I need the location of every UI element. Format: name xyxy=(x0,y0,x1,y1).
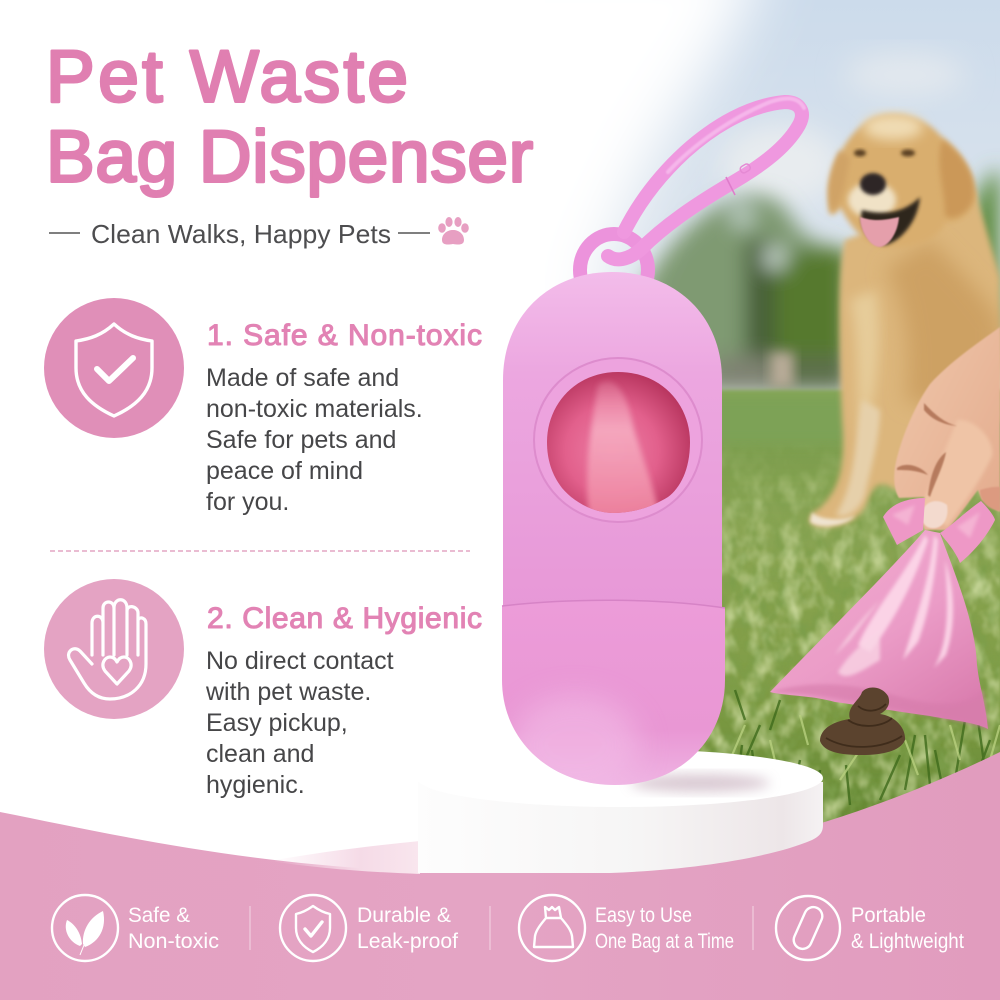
hand holding bag xyxy=(894,327,1000,530)
icon: tied bag xyxy=(519,895,585,961)
sky xyxy=(540,0,1000,400)
label: Non-toxic xyxy=(128,930,219,953)
icon: paw print xyxy=(438,217,469,245)
dog waste xyxy=(820,687,905,755)
label: One Bag at a Time xyxy=(595,930,734,953)
attachment ring xyxy=(580,234,648,306)
title xyxy=(46,36,533,198)
body text: clean and hygienic: Easy pickup, xyxy=(206,709,348,737)
benefits row xyxy=(52,895,964,961)
body text: clean and hygienic: clean and xyxy=(206,740,314,768)
clip latch xyxy=(726,177,735,195)
label xyxy=(128,904,219,953)
grass texture xyxy=(698,456,1000,822)
white fade over photo xyxy=(0,0,770,880)
icon: capsule xyxy=(776,896,840,960)
capsule bottom shell xyxy=(502,600,725,785)
podium side xyxy=(418,782,823,873)
dispenser shadow xyxy=(630,774,770,792)
hand xyxy=(894,327,1000,530)
pale wedge by podium xyxy=(270,841,420,874)
dog mouth and tongue xyxy=(861,197,920,245)
benefit: easy to use xyxy=(519,895,734,961)
body text: safe and non-toxic: Safe for pets and xyxy=(206,426,396,454)
benefit: safe and non-toxic xyxy=(52,895,219,961)
icon: shield with check xyxy=(44,298,184,438)
heading: clean and hygienic: 2. Clean & Hygienic xyxy=(207,602,482,635)
dashed divider xyxy=(50,550,470,552)
thumb xyxy=(922,420,992,527)
body text: safe and non-toxic: Made of safe and xyxy=(206,364,399,392)
carabiner clip loop xyxy=(608,102,802,259)
bag roll inside opening xyxy=(547,372,690,513)
white podium xyxy=(417,749,823,873)
icon: shield xyxy=(280,895,346,961)
label xyxy=(851,904,964,953)
body text: safe and non-toxic: non-toxic materials. xyxy=(206,395,423,423)
title: Pet Waste xyxy=(46,36,408,118)
body text: clean and hygienic xyxy=(205,647,394,799)
dog body xyxy=(809,190,1000,527)
label xyxy=(357,904,458,953)
label: Easy to Use xyxy=(595,904,692,927)
heading: safe and non-toxic: 1. Safe & Non-toxic xyxy=(207,319,482,352)
benefit: durable and leak-proof xyxy=(280,895,458,961)
pink dispenser product xyxy=(502,98,804,795)
pink waste bag xyxy=(770,498,995,729)
icon: leaves xyxy=(52,895,118,961)
body text: clean and hygienic: with pet waste. xyxy=(205,678,371,706)
label xyxy=(595,904,734,953)
lawn xyxy=(620,390,1000,850)
bag body xyxy=(770,530,988,729)
distant lawn band xyxy=(620,396,1000,444)
finger shading xyxy=(897,403,957,497)
body text: safe and non-toxic xyxy=(206,364,423,516)
blurred trees xyxy=(610,169,1000,392)
body text: safe and non-toxic: for you. xyxy=(206,488,289,516)
subtitle tagline: Clean Walks, Happy Pets xyxy=(91,219,391,249)
bag opening rim xyxy=(534,358,702,522)
capsule top shell xyxy=(503,272,722,610)
benefit: portable and lightweight xyxy=(776,896,964,960)
thumb nail xyxy=(922,501,948,528)
pink bottom band xyxy=(0,752,1000,1000)
dog nose xyxy=(860,173,886,195)
label: Safe & xyxy=(128,904,190,927)
label: Durable & xyxy=(357,904,451,927)
feature 2: clean and hygienic xyxy=(44,579,482,799)
body text: clean and hygienic: No direct contact xyxy=(206,647,394,675)
label: Portable xyxy=(851,904,926,927)
body text: clean and hygienic: hygienic. xyxy=(206,771,305,799)
title: Bag Dispenser xyxy=(46,116,533,198)
dog eyes xyxy=(854,150,866,156)
golden retriever xyxy=(809,114,1000,527)
feature 1: safe and non-toxic xyxy=(44,298,482,516)
bag knot frill xyxy=(883,498,995,563)
photo: park scene with dog xyxy=(587,0,1000,822)
dog head xyxy=(829,114,975,248)
label: Leak-proof xyxy=(357,930,458,953)
label: & Lightweight xyxy=(851,930,964,953)
icon: hand with heart xyxy=(44,579,184,719)
body text: safe and non-toxic: peace of mind xyxy=(206,457,363,485)
podium top xyxy=(417,749,823,807)
